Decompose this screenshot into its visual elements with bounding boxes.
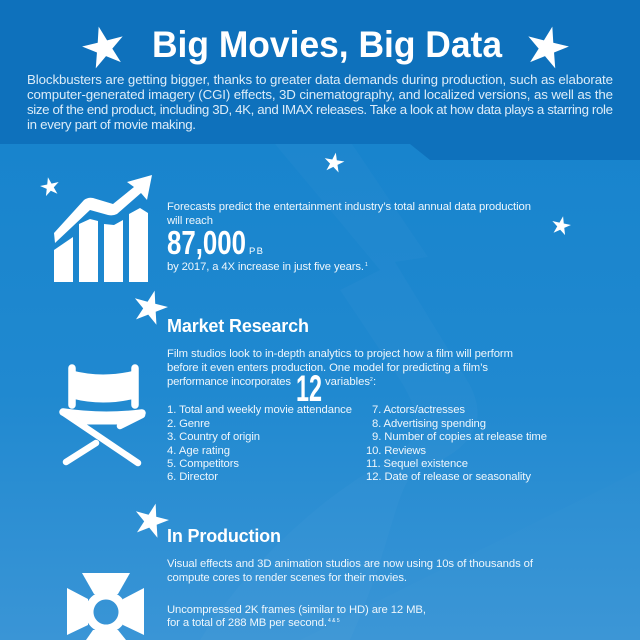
data forecast text: PB [249, 246, 263, 257]
header band [0, 0, 640, 160]
data forecast text: will reach [166, 215, 213, 227]
variables list: right column: 12. Date of release or seasonality [366, 471, 531, 483]
star: chart [39, 175, 61, 197]
variables list: left column: 4. Age rating [167, 445, 230, 457]
in production text: for a total of 288 MB per second. [167, 617, 327, 629]
market research text: Film studios look to in-depth analytics to project how a film will perform [167, 348, 513, 360]
intro paragraph: in every part of movie making. [27, 117, 196, 132]
variables list: right column: 10. Reviews [366, 445, 426, 457]
data forecast text [166, 201, 531, 273]
star: title left [78, 22, 129, 70]
variables list: left column: 2. Genre [167, 418, 210, 430]
intro paragraph: size of the end product, including 3D, 4K, and IMAX releases. Take a look at how data plays a starring role [27, 102, 613, 117]
in production text [167, 558, 534, 629]
data forecast text: by 2017, a 4X increase in just five years. [167, 261, 364, 273]
variables list: right column: 11. Sequel existence [366, 458, 468, 470]
icon: director's chair [63, 368, 142, 463]
market research text: variables [325, 376, 370, 388]
intro paragraph [27, 72, 613, 132]
variables list: right column: 8. Advertising spending [372, 418, 486, 430]
intro paragraph: computer-generated imagery (CGI) effects, 3D cinematography, and localized versions, as well as the [27, 87, 613, 102]
variables list: right column: 9. Number of copies at release time [372, 431, 547, 443]
film strip backdrop [200, 144, 640, 640]
in production text: Uncompressed 2K frames (similar to HD) are 12 MB, [167, 604, 426, 616]
star: in production [131, 499, 172, 539]
variables list: right column [366, 404, 547, 483]
big number 12: 12 [296, 368, 322, 409]
heading: market research: Market Research [167, 316, 309, 336]
intro paragraph: Blockbusters are getting bigger, thanks to greater data demands during production, such as elaborate [27, 72, 613, 87]
variables list: left column: 5. Competitors [167, 458, 239, 470]
market research text: 2 [370, 377, 373, 383]
variables list: left column [167, 404, 352, 483]
variables list: right column: 7. Actors/actresses [372, 404, 465, 416]
heading: in production: In Production [167, 526, 281, 546]
background [0, 144, 640, 640]
variables list: left column: 1. Total and weekly movie attendance [167, 404, 352, 416]
star: right [550, 214, 572, 236]
market research text: performance incorporates [167, 376, 291, 388]
market research text: : [373, 376, 376, 388]
market research text [167, 348, 513, 409]
market research text: before it even enters production. One model for predicting a film’s [167, 362, 488, 374]
data forecast text: Forecasts predict the entertainment industry’s total annual data production [167, 201, 531, 213]
in production text: 4 & 5 [328, 618, 340, 624]
variables list: left column: 3. Country of origin [167, 431, 260, 443]
data forecast text: 1 [365, 262, 368, 268]
big number: 87,000 [167, 224, 246, 261]
icon: rising bar chart [54, 175, 152, 282]
title: Big Movies, Big Data [152, 24, 502, 65]
in production text: compute cores to render scenes for their movies. [167, 572, 407, 584]
variables list: left column: 6. Director [167, 471, 218, 483]
icon: stage light [67, 573, 144, 640]
star: top center [323, 151, 346, 173]
star: title right [522, 22, 573, 70]
in production text: Visual effects and 3D animation studios are now using 10s of thousands of [167, 558, 534, 570]
star: market research [130, 286, 171, 326]
